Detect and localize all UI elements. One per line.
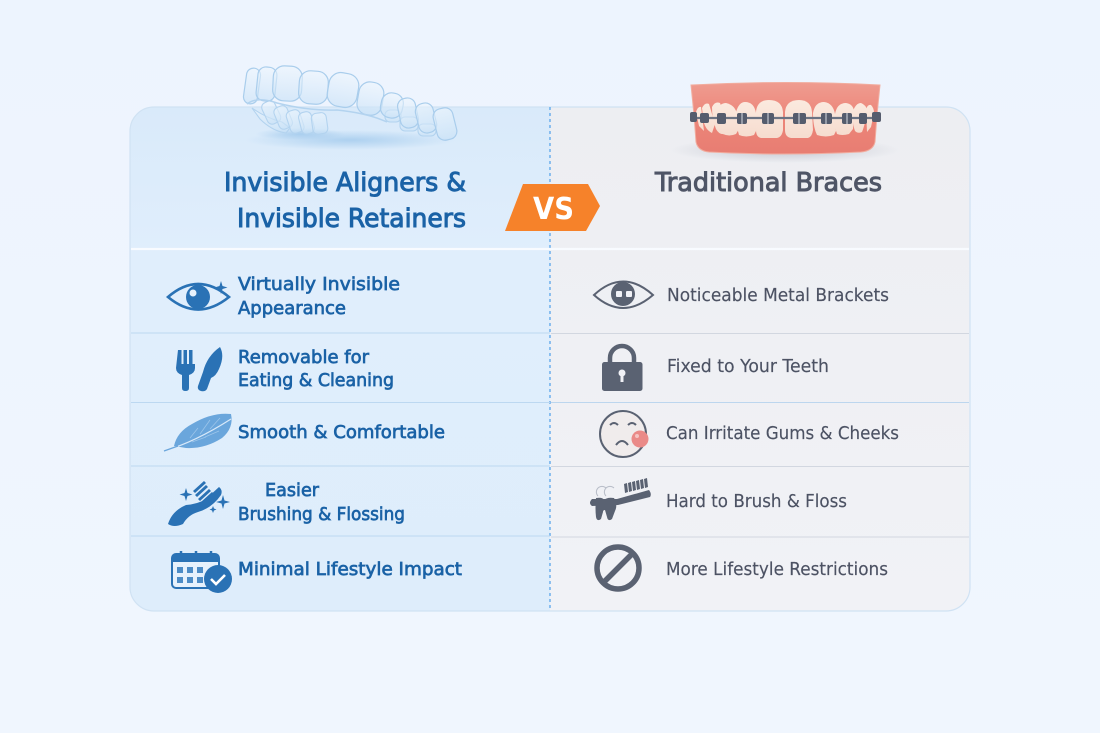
- title: invisible aligners: Invisible Aligners &: [224, 168, 466, 198]
- VS badge: [505, 184, 600, 231]
- panel: invisible aligners column: [130, 107, 550, 611]
- icon: padlock: [602, 346, 642, 391]
- row: removable: [176, 347, 394, 391]
- row: minimal lifestyle impact: [172, 551, 462, 593]
- row: irritate gums and cheeks: [600, 411, 899, 457]
- icon: eye with sparkle: [168, 281, 229, 310]
- panel: traditional braces column: [550, 107, 970, 611]
- icon: toothbrush with sparkles: [168, 481, 230, 526]
- title: invisible aligners: [224, 168, 466, 234]
- icon: feather: [164, 414, 232, 451]
- icon: tooth with toothbrush: [590, 478, 651, 520]
- icon: prohibition sign: [597, 547, 639, 589]
- row: irritate gums and cheeks: Can Irritate Gums & Cheeks: [666, 423, 899, 444]
- row: more lifestyle restrictions: More Lifestyle Restrictions: [666, 559, 888, 580]
- row: virtually invisible: Virtually Invisible: [238, 274, 400, 295]
- row: virtually invisible: Appearance: [238, 298, 346, 319]
- row: more lifestyle restrictions: [597, 547, 888, 589]
- icon: eye with brackets: [594, 282, 653, 308]
- row: removable: Eating & Cleaning: [238, 370, 394, 391]
- row: noticeable metal brackets: [594, 282, 889, 308]
- title: traditional braces: Traditional Braces: [654, 168, 882, 198]
- VS badge: VS: [533, 192, 574, 227]
- row: hard to brush and floss: Hard to Brush & Floss: [666, 491, 847, 512]
- row: smooth and comfortable: [164, 414, 445, 451]
- row: virtually invisible: [168, 274, 400, 319]
- row: removable: Removable for: [238, 347, 370, 368]
- row: fixed to your teeth: Fixed to Your Teeth: [667, 356, 829, 377]
- icon: fork and knife: [176, 347, 222, 391]
- row: easier brushing: Brushing & Flossing: [238, 504, 405, 525]
- row: hard to brush and floss: [590, 478, 847, 520]
- row: easier brushing: [168, 480, 405, 526]
- icon: sad face with red cheek: [600, 411, 648, 457]
- row: fixed to your teeth: [602, 346, 829, 391]
- row: easier brushing: Easier: [265, 480, 320, 501]
- aligner illustration: [243, 65, 459, 150]
- icon: calendar with check: [172, 551, 232, 593]
- title: invisible aligners: Invisible Retainers: [237, 204, 466, 234]
- braces illustration: [670, 82, 900, 163]
- row: smooth and comfortable: Smooth & Comfortable: [238, 422, 445, 443]
- row: minimal lifestyle impact: Minimal Lifestyle Impact: [238, 559, 462, 580]
- comparison panel: [130, 107, 970, 611]
- row: noticeable metal brackets: Noticeable Metal Brackets: [667, 285, 889, 306]
